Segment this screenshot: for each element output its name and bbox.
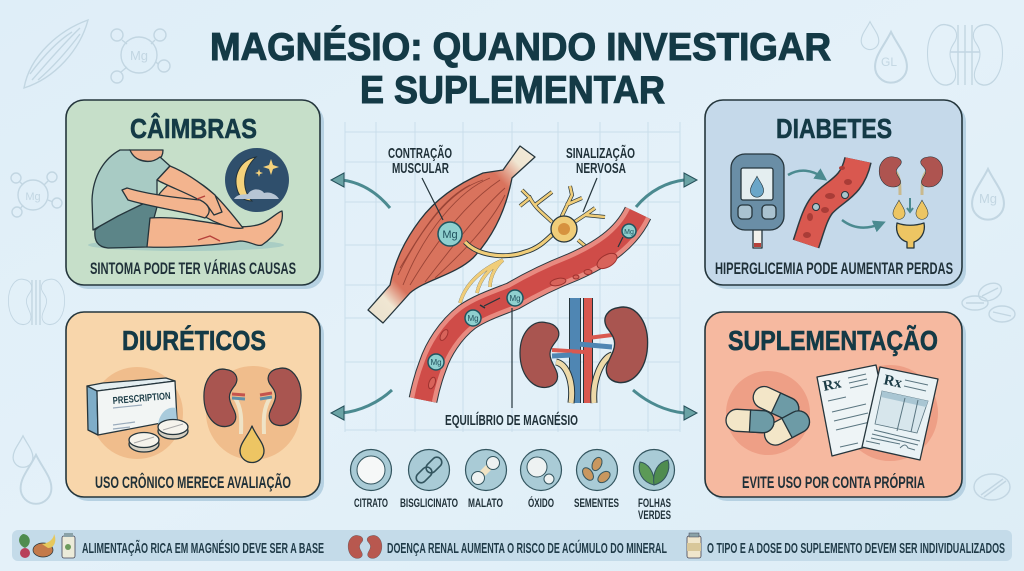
panel: câimbras: [66, 100, 324, 289]
label: sinalização nervosa: [566, 144, 635, 177]
icon: capsules: [725, 383, 813, 449]
icon: faint drops GL: GL: [881, 55, 897, 69]
bar background: [12, 530, 1012, 561]
arrow: vessel to bladder: [842, 220, 880, 228]
Mg ions: Mg: [442, 229, 458, 241]
item: folhas verdes: VERDES: [638, 508, 671, 522]
illustration: neuron: [460, 186, 605, 303]
icon: night moon: [225, 148, 289, 212]
Mg ions: Mg: [509, 294, 521, 303]
background discs: [726, 365, 938, 461]
panel background: [66, 312, 324, 501]
caption: EVITE USO POR CONTA PRÓPRIA: [742, 473, 925, 492]
icon: faint tablet: [974, 474, 1010, 500]
icon: prescription box: [87, 378, 177, 435]
heading: CÂIMBRAS: [130, 113, 257, 144]
icon: faint kidneys left: [8, 279, 65, 325]
arrow: to suplementação: [633, 390, 697, 420]
label: contração muscular: CONTRAÇÃO: [388, 144, 452, 162]
icon: glucometer: [731, 154, 784, 248]
Mg ions: [428, 222, 636, 370]
illustration: blood vessel: [423, 213, 638, 400]
icon: faint pills: [962, 280, 1015, 322]
item: sementes: SEMENTES: [574, 496, 619, 510]
heading: DIABETES: [776, 113, 892, 144]
item: bisglicinato: [400, 450, 458, 510]
icon: faint muscle: [24, 20, 88, 88]
Mg ions: Mg: [430, 358, 442, 367]
icon: kidneys with drop: [204, 368, 301, 462]
item: óxido: [520, 450, 562, 510]
item: folhas verdes: FOLHAS: [638, 496, 671, 510]
icon: faint Mg molecule left: Mg: [25, 191, 41, 203]
icon: faint Mg drop: Mg: [979, 191, 997, 206]
Mg ions: Mg: [467, 314, 479, 323]
centre illustration: [368, 144, 648, 429]
illustration: blood vessel: [803, 160, 858, 244]
item: óxido: ÓXIDO: [528, 495, 554, 510]
label: contração muscular: MUSCULAR: [392, 160, 449, 177]
icon: faint drops GL: [861, 22, 907, 83]
item: citrato: CITRATO: [354, 496, 388, 510]
heading: DIURÉTICOS: [122, 325, 266, 356]
arrow: to diuréticos: [331, 390, 392, 420]
caption: USO CRÔNICO MERECE AVALIAÇÃO: [95, 472, 291, 492]
icon: faint drops left: [13, 436, 51, 504]
grid behind centre illustration: [345, 122, 680, 432]
arrow: meter to vessel: [788, 171, 822, 177]
title: [210, 25, 831, 112]
title: E SUPLEMENTAR: [360, 69, 665, 112]
panel background: [705, 312, 966, 501]
label: contração muscular: [388, 144, 452, 177]
title: MAGNÉSIO: QUANDO INVESTIGAR: [210, 25, 831, 69]
label: sinalização nervosa: SINALIZAÇÃO: [566, 144, 635, 162]
arrow: to câimbras: [331, 173, 390, 208]
icon: prescription box: PRESCRIPTION: [112, 391, 171, 407]
icon: faint Mg molecule top: Mg: [130, 48, 148, 63]
icon: faint kidneys right: [928, 25, 1002, 85]
note: doença renal: DOENÇA RENAL AUMENTA O RISCO DE ACÚMULO DO MINERAL: [387, 539, 667, 557]
leader lines: [422, 178, 597, 408]
panel background: [66, 100, 324, 289]
item: folhas verdes: [634, 450, 674, 522]
label: equilíbrio de magnésio: EQUILÍBRIO DE MAGNÉSIO: [445, 412, 578, 429]
note: alimentação: ALIMENTAÇÃO RICA EM MAGNÉSIO DEVE SER A BASE: [82, 539, 324, 557]
Mg ions: Mg: [624, 229, 634, 236]
caption: SINTOMA PODE TER VÁRIAS CAUSAS: [90, 259, 296, 278]
illustration: kidneys and bladder: [879, 157, 943, 248]
panel background: [705, 100, 966, 289]
heading: SUPLEMENTAÇÃO: [728, 325, 938, 356]
icon: prescription sheets: Rx: [882, 372, 904, 392]
item: malato: MALATO: [468, 496, 503, 510]
panel: diuréticos: [66, 312, 324, 501]
label: sinalização nervosa: NERVOSA: [576, 160, 626, 177]
arrow: to diabetes: [636, 173, 697, 207]
background discs: [91, 366, 300, 460]
icon: faint Mg drop: [972, 169, 1004, 220]
item: malato: [466, 450, 506, 510]
panel: suplementação: [705, 312, 966, 501]
supplement and food row: [350, 450, 674, 522]
icon: faint Mg molecule left: [11, 172, 62, 217]
illustration: kidneys and vessels: [520, 298, 648, 403]
illustration: muscle: [368, 146, 535, 323]
icon: tablets: [129, 420, 188, 452]
item: bisglicinato: BISGLICINATO: [400, 496, 458, 510]
footer bar: [12, 530, 1012, 561]
item: sementes: [574, 450, 619, 510]
illustration: person with cramp: [88, 150, 284, 251]
icon: prescription sheets: Rx: [822, 375, 843, 395]
icon: healthy food: [19, 533, 75, 558]
item: citrato: [350, 450, 392, 510]
icon: faint Mg molecule top: [111, 29, 170, 83]
icon: supplement bottle: [687, 533, 701, 558]
icon: kidneys: [348, 535, 382, 558]
panel: diabetes: [705, 100, 966, 289]
icon: prescription sheets: [817, 365, 938, 460]
